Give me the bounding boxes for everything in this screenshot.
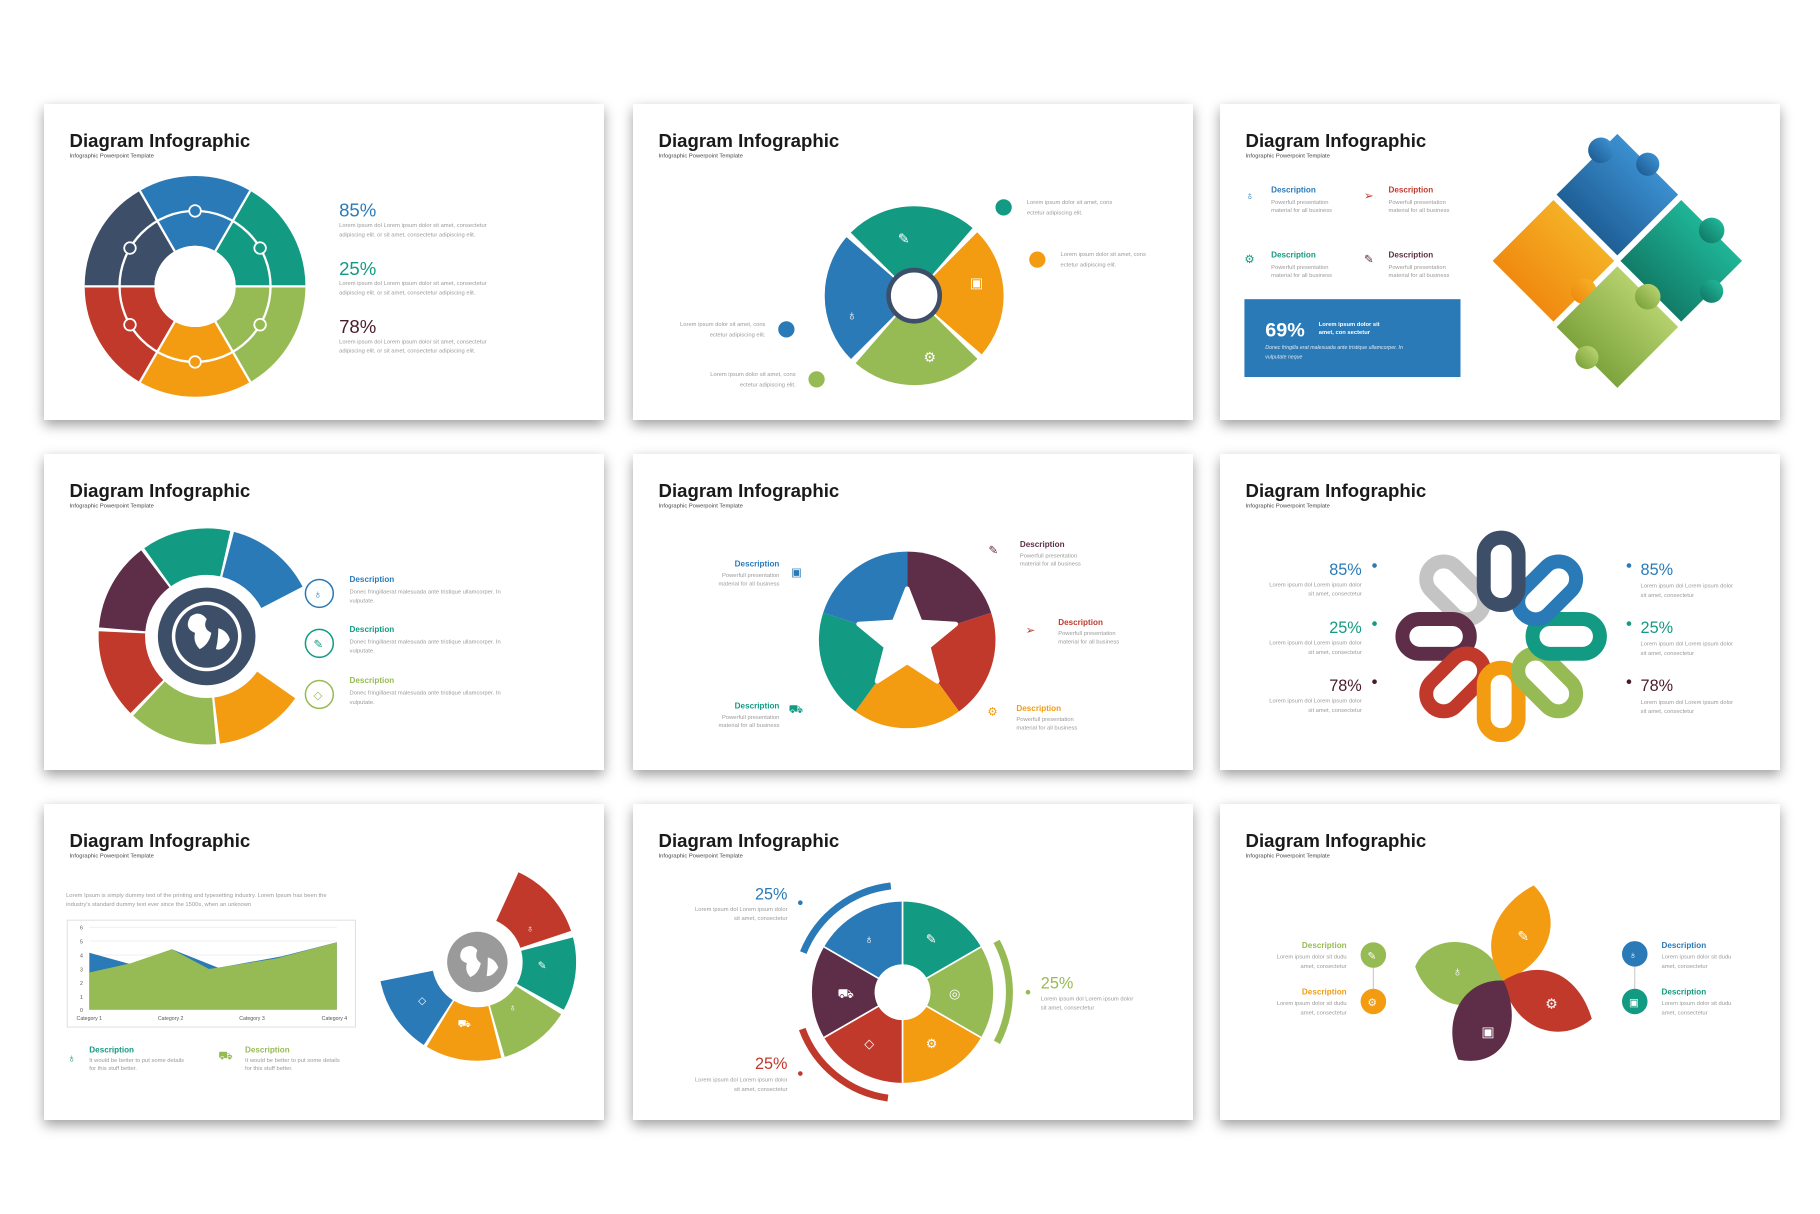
- callout blue: [680, 321, 794, 338]
- callout orange: Lorem ipsum dolor sit amet, cons: [1061, 252, 1146, 258]
- panel: slide 8 donut with arcs: [633, 804, 1193, 1120]
- area chart: [67, 920, 355, 1027]
- title: Infographic Powerpoint Template: [70, 503, 154, 509]
- description blue: ♁: [1246, 189, 1254, 202]
- item 3: ◇: [314, 689, 324, 702]
- right labels: amet, consectetur: [1661, 1010, 1708, 1016]
- left stats: Lorem ipsum dol Lorem ipsum dolor: [1269, 641, 1362, 647]
- stat bottom left: [695, 1055, 803, 1093]
- stat top left: [695, 885, 803, 922]
- stat 25%: Lorem ipsum dol Lorem ipsum dolor sit amet, consectetur: [339, 281, 487, 287]
- item 3: Donec fringillaerat malesuada ante tristique ullamcorper. In: [350, 690, 501, 696]
- right labels: ▣: [1629, 998, 1639, 1009]
- left labels: [1277, 941, 1386, 1016]
- segmented donut: ◇: [864, 1036, 874, 1051]
- title: Diagram Infographic: [659, 130, 839, 151]
- item 1: Donec fringillaerat malesuada ante tristique ullamcorper. In: [350, 589, 501, 595]
- panel: slide 6 chain flower: [1220, 454, 1780, 770]
- petals: ▣: [1481, 1023, 1495, 1039]
- bottom description 1: It would be better to put some details: [89, 1058, 184, 1064]
- stat right: sit amet, consectetur: [1041, 1006, 1094, 1012]
- label red: [1026, 618, 1119, 645]
- left labels: Lorem ipsum dolor sit dudu: [1277, 955, 1347, 961]
- title: Diagram Infographic: [659, 830, 839, 851]
- right labels: Description: [1661, 941, 1706, 950]
- description green: Description: [1271, 250, 1316, 259]
- stat 78%: adipiscing elit. or sit amet, consectetur adipiscing elit.: [339, 349, 476, 355]
- right stats: Lorem ipsum dol Lorem ipsum dolor: [1641, 642, 1733, 648]
- callout orange: ectetur adipiscing elit.: [1061, 263, 1117, 269]
- right stats: Lorem ipsum dol Lorem ipsum dolor: [1641, 700, 1733, 706]
- left stats: 85%: [1329, 561, 1362, 579]
- left labels: amet, consectetur: [1301, 964, 1347, 970]
- right stats: 25%: [1641, 619, 1673, 637]
- title: Infographic Powerpoint Template: [1246, 153, 1330, 159]
- left labels: Description: [1302, 941, 1347, 950]
- panel: slide 7 area chart and fan: [44, 804, 604, 1120]
- area chart: Category 2: [158, 1016, 184, 1022]
- item 2: Donec fringillaerat malesuada ante tristique ullamcorper. In: [350, 639, 501, 645]
- description green: material for all business: [1271, 273, 1332, 279]
- area chart: Category 3: [239, 1016, 265, 1022]
- right stats: 78%: [1641, 677, 1673, 695]
- callout orange: [1029, 252, 1146, 269]
- stat box 69%: 69%: [1265, 319, 1305, 341]
- title: Diagram Infographic: [659, 480, 839, 501]
- arrow cycle diagram: ✎: [898, 230, 910, 246]
- item 1: Description: [350, 575, 394, 584]
- right stats: 85%: [1641, 561, 1673, 579]
- puzzle fan with globe: ✎: [538, 961, 547, 972]
- description maroon: ✎: [1364, 253, 1374, 266]
- label orange: [987, 704, 1077, 731]
- label red: Powerfull presentation: [1058, 631, 1116, 637]
- right stats: sit amet, consectetur: [1641, 651, 1694, 657]
- bottom description 2: [218, 1046, 340, 1072]
- left stats: Lorem ipsum dol Lorem ipsum dolor: [1269, 699, 1362, 705]
- panel: slide 1 puzzle ring: [44, 104, 604, 420]
- petals: ⚙: [1545, 995, 1558, 1011]
- panel: slide 3 puzzle pieces: [1220, 104, 1780, 420]
- right labels: Description: [1661, 988, 1706, 997]
- arrow cycle diagram: ⚙: [923, 349, 936, 365]
- label orange: Description: [1016, 704, 1061, 713]
- puzzle fan with globe: ⛟: [458, 1019, 471, 1030]
- stat bottom left: sit amet, consectetur: [734, 1087, 788, 1093]
- stat box 69%: Lorem ipsum dolor sit: [1319, 322, 1380, 328]
- left stats: 25%: [1329, 619, 1362, 637]
- stat 85%: Lorem ipsum dol Lorem ipsum dolor sit amet, consectetur: [339, 223, 487, 229]
- label red: Description: [1058, 618, 1103, 627]
- panel: slide 5 star circle: [633, 454, 1193, 770]
- bottom description 1: ♁: [67, 1052, 76, 1065]
- area chart: Category 4: [322, 1016, 347, 1022]
- left labels: Lorem ipsum dolor sit dudu: [1277, 1001, 1347, 1007]
- label orange: Powerfull presentation: [1016, 717, 1074, 723]
- label blue: material for all business: [718, 581, 779, 587]
- title: Infographic Powerpoint Template: [70, 153, 154, 159]
- bottom description 1: for this stuff better.: [89, 1066, 137, 1072]
- arrow cycle diagram: [847, 230, 983, 365]
- description green: [1244, 250, 1332, 279]
- puzzle fan with globe: ♁: [526, 924, 534, 935]
- left labels: Description: [1302, 988, 1347, 997]
- stat 85%: 85%: [339, 200, 376, 221]
- right stats: Lorem ipsum dol Lorem ipsum dolor: [1641, 584, 1733, 590]
- stat right: Lorem ipsum dol Lorem ipsum dolor: [1041, 996, 1133, 1002]
- segmented donut: ⛟: [837, 986, 854, 1001]
- area chart: 3: [80, 967, 83, 973]
- area chart: 6: [80, 925, 83, 931]
- title: Diagram Infographic: [1246, 130, 1426, 151]
- label blue: Powerfull presentation: [722, 573, 779, 579]
- title: Infographic Powerpoint Template: [659, 853, 743, 859]
- item 2: vulputate.: [350, 649, 375, 655]
- bottom description 2: It would be better to put some details: [245, 1058, 340, 1064]
- panel: slide 4 globe ring: [44, 454, 604, 770]
- segmented donut: ✎: [926, 931, 936, 946]
- description maroon: material for all business: [1388, 273, 1449, 279]
- callout teal: ectetur adipiscing elit.: [1027, 210, 1083, 216]
- intro paragraph: Lorem Ipsum is simply dummy text of the printing and typesetting industry. Lorem Ipsum has been the: [66, 893, 327, 899]
- bottom description 2: for this stuff better.: [245, 1066, 293, 1072]
- puzzle fan with globe: [405, 890, 549, 1034]
- left stats: 78%: [1329, 677, 1362, 695]
- title: Infographic Powerpoint Template: [659, 503, 743, 509]
- segmented donut: ⚙: [926, 1036, 937, 1051]
- stat top left: sit amet, consectetur: [734, 916, 788, 922]
- label teal: Powerfull presentation: [722, 715, 779, 721]
- description green: ⚙: [1244, 253, 1255, 266]
- petals: ♁: [1452, 963, 1463, 979]
- arrow cycle diagram: ▣: [970, 275, 983, 291]
- stat bottom left: Lorem ipsum dol Lorem ipsum dolor: [695, 1078, 788, 1084]
- item 1: ♁: [314, 588, 322, 601]
- stat top left: 25%: [755, 885, 788, 903]
- label red: material for all business: [1058, 639, 1119, 645]
- chain loops: [1402, 538, 1600, 735]
- arrow cycle diagram: ♁: [847, 307, 857, 323]
- bottom description 1: [67, 1046, 184, 1072]
- puzzle fan with globe: ◇: [418, 996, 426, 1007]
- label orange: ⚙: [987, 705, 998, 718]
- puzzle diamond: [1493, 117, 1759, 396]
- title: Diagram Infographic: [70, 480, 250, 501]
- intro paragraph: industry's standard dummy text ever since the 1500s, when an unknown: [66, 902, 251, 908]
- right labels: Lorem ipsum dolor sit dudu: [1661, 1001, 1731, 1007]
- puzzle fan with globe: ♁: [509, 1003, 517, 1014]
- description red: ➢: [1364, 189, 1374, 202]
- area chart: 1: [80, 995, 83, 1001]
- left labels: ✎: [1368, 952, 1376, 963]
- description maroon: Description: [1388, 250, 1433, 259]
- label teal: ⛟: [789, 703, 804, 716]
- intro paragraph: [66, 893, 327, 908]
- stat 25%: adipiscing elit. or sit amet, consectetur adipiscing elit.: [339, 291, 476, 297]
- stat top left: Lorem ipsum dol Lorem ipsum dolor: [695, 907, 788, 913]
- description blue: Powerfull presentation: [1271, 200, 1328, 206]
- right labels: ♁: [1629, 951, 1637, 962]
- segmented donut: ◎: [949, 986, 960, 1001]
- item 2: ✎: [314, 638, 323, 651]
- description blue: Description: [1271, 185, 1316, 194]
- label blue: [718, 560, 802, 587]
- title: Diagram Infographic: [70, 130, 250, 151]
- description maroon: Powerfull presentation: [1388, 265, 1446, 271]
- stat right: 25%: [1041, 975, 1073, 993]
- callout teal: Lorem ipsum dolor sit amet, cons: [1027, 200, 1112, 206]
- label teal: [718, 701, 804, 729]
- left stats: [1269, 561, 1377, 714]
- title: Diagram Infographic: [1246, 830, 1426, 851]
- bottom description 1: Description: [89, 1046, 134, 1055]
- stat 78%: [339, 316, 487, 355]
- callout green: [710, 371, 825, 388]
- item 3: vulputate.: [350, 700, 375, 706]
- title: Infographic Powerpoint Template: [70, 853, 154, 859]
- segmented ring with globe: [122, 552, 291, 721]
- panel: slide 2 arrow cycle: [633, 104, 1193, 420]
- stat 85%: [339, 200, 487, 238]
- stat box 69%: [1244, 299, 1460, 377]
- petals: [1415, 885, 1592, 1061]
- petals: ✎: [1517, 928, 1529, 944]
- description red: [1364, 185, 1449, 214]
- description blue: [1246, 185, 1332, 214]
- stat 78%: Lorem ipsum dol Lorem ipsum dolor sit amet, consectetur: [339, 339, 487, 345]
- item 2: Description: [350, 625, 394, 634]
- bottom description 2: ⛟: [218, 1050, 233, 1063]
- title: Infographic Powerpoint Template: [659, 153, 743, 159]
- label maroon: [989, 540, 1081, 568]
- stat 25%: [339, 258, 487, 297]
- description red: Powerfull presentation: [1388, 200, 1446, 206]
- item 1: vulputate.: [350, 599, 375, 605]
- area chart: 4: [80, 953, 83, 959]
- item 3: [305, 676, 501, 708]
- panel: slide 9 petal shape: [1220, 804, 1780, 1120]
- left labels: amet, consectetur: [1301, 1010, 1347, 1016]
- callout blue: Lorem ipsum dolor sit amet, cons: [680, 322, 766, 328]
- label teal: material for all business: [718, 723, 779, 729]
- title: Infographic Powerpoint Template: [1246, 503, 1330, 509]
- label teal: Description: [735, 701, 779, 710]
- right stats: [1627, 561, 1733, 715]
- star pie: [859, 589, 956, 684]
- callout teal: [995, 199, 1112, 216]
- area chart: 2: [80, 981, 83, 987]
- description red: Description: [1388, 185, 1433, 194]
- right stats: sit amet, consectetur: [1641, 709, 1694, 715]
- area chart: Category 1: [77, 1016, 102, 1022]
- stat bottom left: 25%: [755, 1055, 788, 1073]
- stat box 69%: vulputate neque: [1265, 354, 1303, 360]
- area chart: 0: [80, 1008, 83, 1014]
- bottom description 2: Description: [245, 1046, 290, 1055]
- area chart: 5: [80, 939, 83, 945]
- left stats: sit amet, consectetur: [1308, 592, 1362, 598]
- description maroon: [1364, 250, 1449, 279]
- stat 78%: 78%: [339, 316, 376, 337]
- callout blue: ectetur adipiscing elit.: [710, 332, 766, 338]
- item 2: [305, 625, 501, 657]
- title: Diagram Infographic: [70, 830, 250, 851]
- stat box 69%: Donec fringilla erat malesuada ante tristique ullamcorper. In: [1265, 345, 1403, 351]
- title: Diagram Infographic: [1246, 480, 1426, 501]
- item 1: [305, 575, 501, 607]
- label red: ➢: [1026, 624, 1036, 637]
- label maroon: ✎: [989, 544, 998, 557]
- description red: material for all business: [1388, 208, 1449, 214]
- segmented donut: [796, 885, 1009, 1099]
- right labels: amet, consectetur: [1661, 964, 1708, 970]
- segmented donut: ♁: [864, 931, 874, 946]
- item 3: Description: [350, 676, 394, 685]
- stat box 69%: amet, con sectetur: [1319, 330, 1371, 336]
- right stats: sit amet, consectetur: [1641, 593, 1694, 599]
- right labels: Lorem ipsum dolor sit dudu: [1661, 955, 1731, 961]
- label maroon: Powerfull presentation: [1020, 553, 1077, 559]
- label blue: Description: [735, 560, 779, 569]
- left stats: sit amet, consectetur: [1308, 650, 1362, 656]
- stat 25%: 25%: [339, 258, 376, 279]
- callout green: Lorem ipsum dolor sit amet, cons: [710, 372, 796, 378]
- label maroon: Description: [1020, 540, 1065, 549]
- callout green: ectetur adipiscing elit.: [740, 382, 796, 388]
- stat right: [1026, 975, 1133, 1012]
- label orange: material for all business: [1016, 725, 1077, 731]
- left labels: ⚙: [1368, 998, 1377, 1009]
- puzzle donut chart: [85, 191, 305, 382]
- left stats: sit amet, consectetur: [1308, 708, 1362, 714]
- left stats: Lorem ipsum dol Lorem ipsum dolor: [1269, 582, 1362, 588]
- stat 85%: adipiscing elit. or sit amet, consectetur adipiscing elit.: [339, 232, 476, 238]
- description green: Powerfull presentation: [1271, 265, 1328, 271]
- title: Infographic Powerpoint Template: [1246, 853, 1330, 859]
- label maroon: material for all business: [1020, 562, 1081, 568]
- label blue: ▣: [791, 566, 802, 579]
- right labels: [1622, 941, 1731, 1016]
- description blue: material for all business: [1271, 208, 1332, 214]
